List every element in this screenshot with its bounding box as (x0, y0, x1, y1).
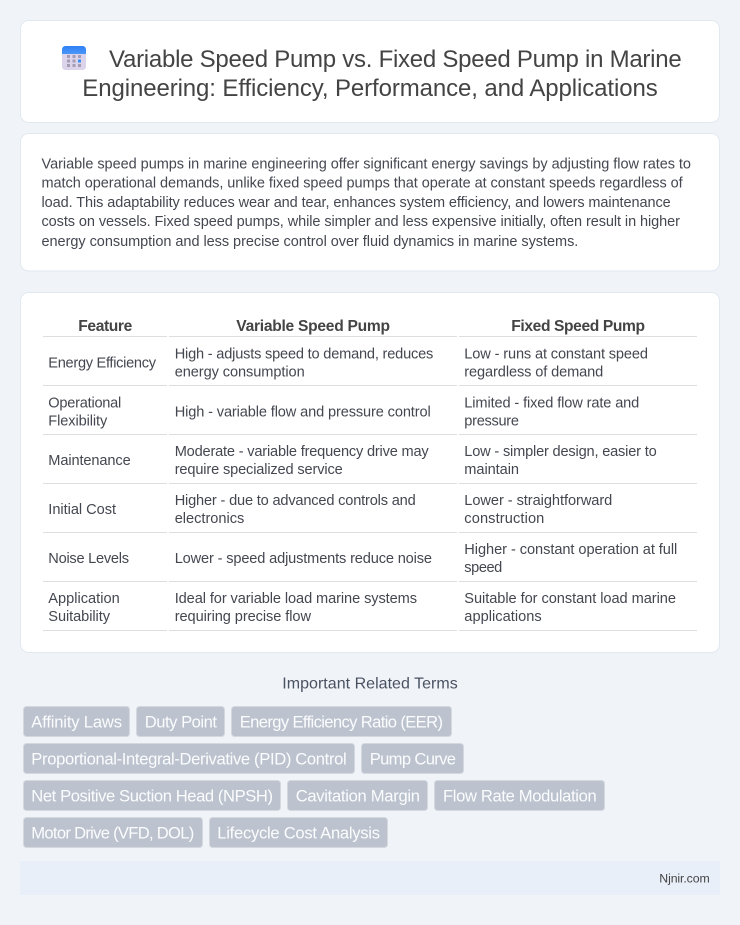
tag: pump curve: Pump Curve (370, 749, 456, 768)
tag: npsh: Net Positive Suction Head (NPSH) (31, 786, 273, 805)
tag: lifecycle cost analysis: Lifecycle Cost Analysis (217, 823, 380, 842)
table row: maintenance (48, 444, 657, 478)
table row: energy efficiency: regardless of demand (464, 364, 603, 380)
tag: energy efficiency ratio (232, 706, 452, 736)
table row: noise levels: Lower - speed adjustments reduce noise (175, 551, 432, 567)
table row: energy efficiency (48, 346, 648, 380)
table row: initial cost: Initial Cost (48, 502, 116, 518)
heading: important related terms: Important Related Terms (282, 676, 458, 693)
table row: energy efficiency: High - adjusts speed to demand, reduces (175, 346, 433, 362)
panel: comparison table (20, 292, 720, 652)
table header row: Variable Speed Pump (236, 318, 390, 335)
tag: flow rate modulation (434, 780, 604, 810)
table row: noise levels: Higher - constant operation at full (464, 542, 677, 558)
table row: noise levels (48, 542, 677, 576)
title: Variable Speed Pump vs. Fixed Speed Pump in Marine (109, 46, 682, 73)
tag: pid control (24, 744, 354, 774)
table row: application suitability: Suitability (48, 609, 111, 625)
tag: cavitation margin: Cavitation Margin (296, 786, 420, 805)
text block: introduction paragraph (42, 156, 691, 250)
table row: noise levels: speed (464, 560, 502, 576)
tag: pump curve (362, 744, 464, 774)
table row: application suitability: Ideal for variable load marine systems (175, 591, 417, 607)
panel: title header (20, 20, 720, 122)
footer source text: Njnir.com (659, 871, 710, 885)
text block: introduction paragraph: energy consumption and less precise control over fluid dynamics in marine systems. (42, 234, 578, 250)
text block: introduction paragraph: Variable speed pumps in marine engineering offer significant energy savings by adjusting flow rates to (42, 156, 691, 172)
table row: initial cost: electronics (175, 511, 244, 527)
tag: lifecycle cost analysis (210, 818, 388, 848)
table row: operational flexibility: Operational (48, 395, 121, 411)
table row: application suitability: applications (464, 609, 542, 625)
tag: motor drive (24, 818, 202, 848)
table row: application suitability: requiring precise flow (175, 609, 311, 625)
table header row (78, 318, 645, 335)
table header row: Feature (78, 318, 133, 335)
table row: maintenance: Moderate - variable frequency drive may (175, 444, 429, 460)
text block: introduction paragraph: load. This adaptability reduces wear and tear, enhances system efficiency, and lowers maintenance (42, 195, 671, 211)
text block: introduction paragraph: costs on vessels. Fixed speed pumps, while simpler and less expensive initially, often result in higher (42, 214, 680, 230)
table row: maintenance: Low - simpler design, easier to (464, 444, 657, 460)
tag: affinity laws: Affinity Laws (31, 712, 122, 731)
table row: energy efficiency: Low - runs at constant speed (464, 346, 648, 362)
table row: maintenance: maintain (464, 462, 519, 478)
table row: application suitability: Suitable for constant load marine (464, 591, 676, 607)
text block: introduction paragraph: match operational demands, unlike fixed speed pumps that operate at constant speeds regardless of (42, 175, 684, 191)
tag: cavitation margin (288, 780, 428, 810)
table row: application suitability (48, 591, 676, 625)
table row: initial cost (48, 493, 612, 527)
tag: motor drive: Motor Drive (VFD, DOL) (31, 823, 194, 842)
table row: operational flexibility: Limited - fixed flow rate and (464, 395, 639, 411)
tag: pid control: Proportional-Integral-Derivative (PID) Control (31, 749, 347, 768)
panel: introduction (20, 134, 720, 271)
table row: energy efficiency: energy consumption (175, 364, 305, 380)
table row: application suitability: Application (48, 591, 120, 607)
table row: initial cost: Higher - due to advanced controls and (175, 493, 416, 509)
table row: initial cost: construction (464, 511, 544, 527)
tag: affinity laws (24, 706, 130, 736)
table row: maintenance: require specialized service (175, 462, 343, 478)
table header row: Fixed Speed Pump (511, 318, 645, 335)
tag: npsh (24, 780, 280, 810)
related term tags (24, 706, 604, 848)
table row: operational flexibility: Flexibility (48, 413, 108, 429)
table row: energy efficiency: Energy Efficiency (48, 355, 157, 371)
table row: operational flexibility: pressure (464, 413, 519, 429)
title (82, 46, 682, 102)
table row: initial cost: Lower - straightforward (464, 493, 612, 509)
tag: flow rate modulation: Flow Rate Modulation (443, 786, 597, 805)
table row: operational flexibility: High - variable flow and pressure control (175, 404, 431, 420)
table row: operational flexibility (48, 395, 639, 429)
title: Engineering: Efficiency, Performance, and Applications (82, 75, 658, 102)
icon: calendar (62, 46, 86, 70)
tag: energy efficiency ratio: Energy Efficiency Ratio (EER) (240, 712, 443, 731)
tag: duty point: Duty Point (145, 712, 217, 731)
tag: duty point (136, 706, 224, 736)
table row: noise levels: Noise Levels (48, 551, 129, 567)
footer (20, 861, 720, 895)
table row: maintenance: Maintenance (48, 453, 131, 469)
